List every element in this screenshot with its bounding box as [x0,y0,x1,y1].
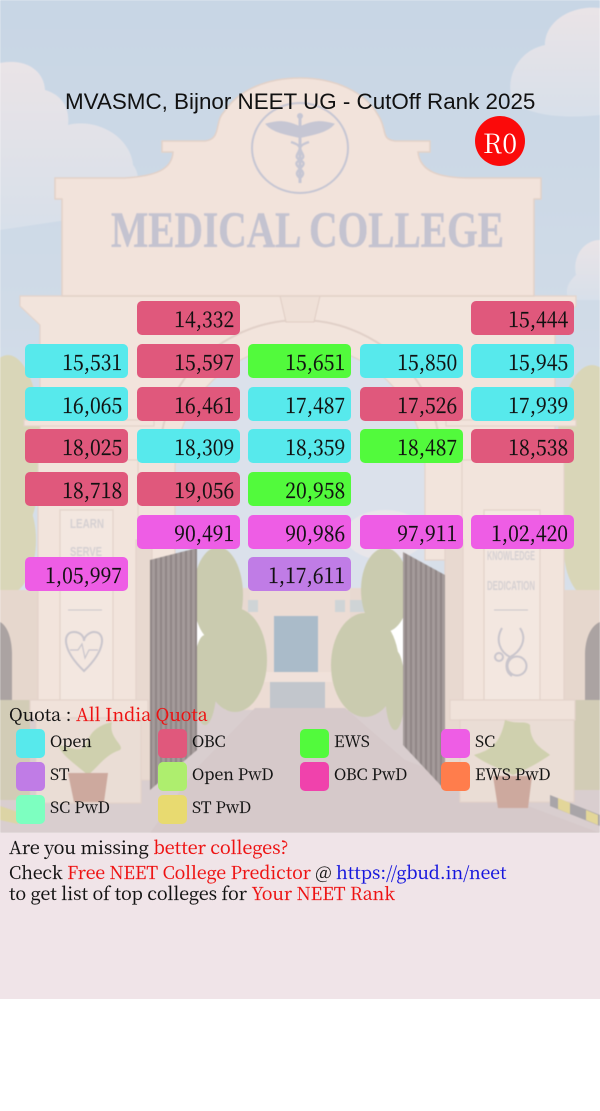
legend: OBC [158,729,226,758]
legend: Open PwD [158,762,274,791]
legend: Open PwD: Open PwD [192,762,274,785]
row 3: 16,461 [175,389,234,420]
row 3 [25,387,574,421]
legend: EWS PwD [441,762,551,791]
title: MVASMC, Bijnor NEET UG - CutOff Rank 2025 [65,89,535,114]
kerb stripes [0,795,600,826]
row 2: 15,597 [175,346,234,377]
row 7: 1,05,997 [46,559,122,590]
legend: ST: ST [50,762,69,785]
row 5 [25,472,351,506]
row 5: 18,718 [63,474,122,505]
row 4: 18,309 [175,431,234,462]
row 7: 1,17,611 [269,559,346,590]
caduceus medallion [252,103,348,193]
legend: SC [441,729,495,758]
quota heading: Quota : All India Quota [9,702,208,727]
legend: OBC PwD [300,762,407,791]
legend: ST PwD [158,795,251,824]
legend [16,729,551,824]
heart and stethoscope icons [66,610,528,676]
legend: EWS [300,729,370,758]
row 4: 18,025 [63,431,122,462]
lower arch structure [20,296,576,560]
right pillar [445,420,576,802]
row 4 [25,429,574,463]
row 3: 17,939 [509,389,568,420]
ground [0,700,600,833]
pillar carvings: SERVE [70,544,102,559]
legend: SC PwD [16,795,110,824]
row 1: 14,332 [175,303,234,334]
legend: ST PwD: ST PwD [192,795,251,818]
promo predictor line: Check Free NEET College Predictor @ https://gbud.in/neet [9,860,506,885]
row 6 [137,515,574,549]
row 1 [137,301,574,335]
pillar carvings [70,516,535,593]
legend: EWS PwD: EWS PwD [475,762,551,785]
side trees [0,355,600,600]
far building [225,588,375,710]
background illustration: medical college gate [0,0,600,833]
rank grid [25,301,574,591]
row 2 [25,344,574,378]
legend: SC: SC [475,729,495,752]
pillar carvings: LEARN [70,516,104,531]
left pillar [24,420,154,803]
round badge: R0 [483,122,517,161]
legend: Open: Open [50,729,92,752]
row 2: 15,651 [286,346,346,377]
row 1: 15,444 [509,303,568,334]
pillar carvings: KNOWLEDGE [487,548,535,563]
row 7 [25,557,351,591]
row 5: 20,958 [286,474,346,505]
legend: SC PwD: SC PwD [50,795,110,818]
legend: Open [16,729,92,758]
side walls [0,590,600,705]
row 4: 18,487 [398,431,458,462]
row 6: 90,986 [286,517,346,548]
row 3: 17,526 [398,389,458,420]
planters [58,720,550,808]
sky through the arch [170,340,430,600]
round badge [475,116,525,166]
row 3: 16,065 [63,389,122,420]
pillar carvings: DEDICATION [487,578,535,593]
row 3: 17,487 [286,389,346,420]
row 6: 90,491 [175,517,234,548]
promo rank line: to get list of top colleges for Your NEET Rank [9,881,395,906]
upper arch and pediment [55,78,541,296]
promo panel [0,833,600,999]
row 6: 97,911 [398,517,458,548]
legend: EWS: EWS [334,729,370,752]
avenue trees [193,547,409,730]
clouds [0,8,600,300]
row 5: 19,056 [175,474,234,505]
iron gates [150,548,445,790]
legend: ST [16,762,70,791]
row 4: 18,538 [509,431,568,462]
legend: OBC: OBC [192,729,226,752]
promo question: Are you missing better colleges? [9,834,288,860]
row 2: 15,945 [509,346,568,377]
row 4: 18,359 [286,431,346,462]
row 2: 15,850 [398,346,458,377]
row 2: 15,531 [63,346,122,377]
row 6: 1,02,420 [492,517,568,548]
legend: OBC PwD: OBC PwD [334,762,407,785]
